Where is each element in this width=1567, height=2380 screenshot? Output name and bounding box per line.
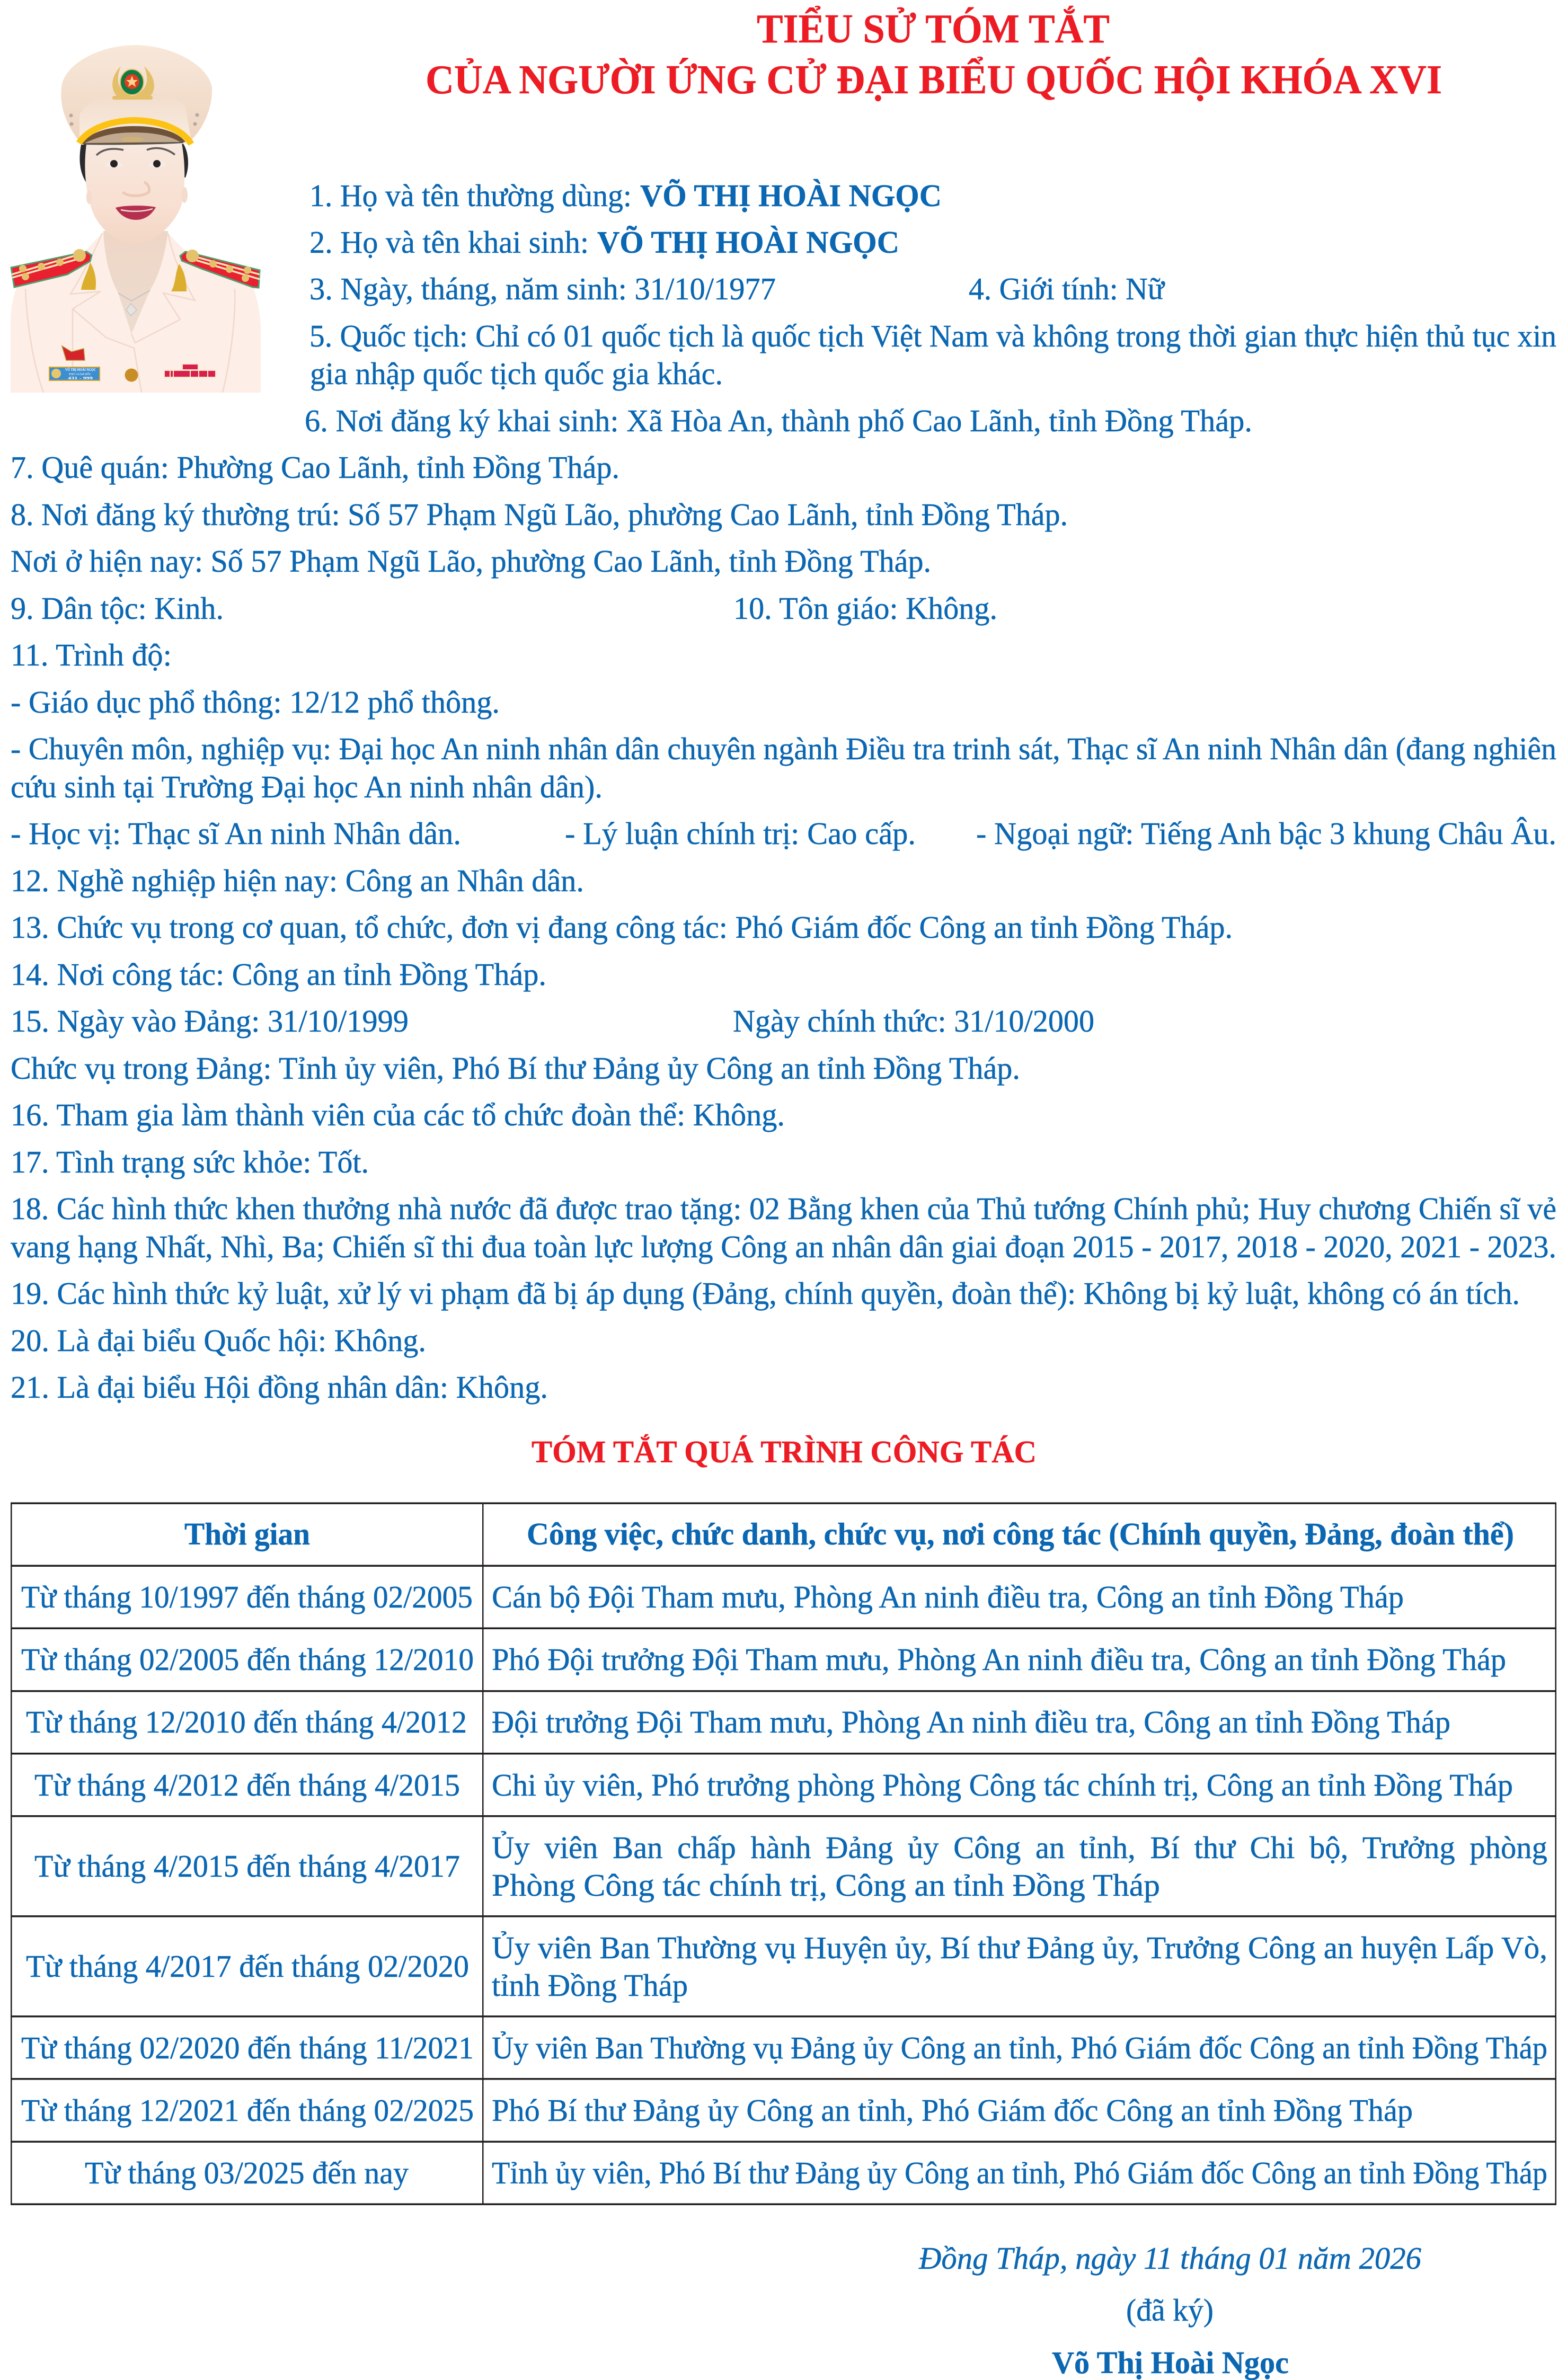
title: TIỂU SỬ TÓM TẮT (757, 6, 1110, 51)
name tag: VÕ THỊ HOÀI NGỌC (65, 368, 96, 372)
cap crown (61, 45, 212, 139)
item 19: discipline: 19. Các hình thức kỷ luật, xử lý vi phạm đã bị áp dụng (Đảng, chính quyền, đoàn thể): Không bị kỷ luật, không có án tích. (11, 1276, 1520, 1311)
signed note: (đã ký) (1126, 2293, 1214, 2328)
row 2: Từ tháng 02/2005 đến tháng 12/2010 (21, 1642, 474, 1677)
title (426, 6, 1442, 102)
item 20: national assembly deputy: 20. Là đại biểu Quốc hội: Không. (11, 1323, 426, 1358)
foreign language: - Ngoại ngữ: Tiếng Anh bậc 3 khung Châu Âu. (976, 816, 1556, 851)
row 3 (26, 1704, 1450, 1739)
item 6: birth registration: 6. Nơi đăng ký khai sinh: Xã Hòa An, thành phố Cao Lãnh, tỉnh Đồng Tháp. (305, 403, 1252, 438)
collar leaves (81, 262, 187, 291)
row 8 (21, 2093, 1413, 2128)
cap visor (81, 126, 185, 144)
row 8: Từ tháng 12/2021 đến tháng 02/2025 (21, 2093, 474, 2128)
current residence: Nơi ở hiện nay: Số 57 Phạm Ngũ Lão, phường Cao Lãnh, tỉnh Đồng Tháp. (11, 544, 931, 579)
row 5: Ủy viên Ban chấp hành Đảng ủy Công an tỉnh, Bí thư Chi bộ, Trưởng phòng (492, 1830, 1547, 1865)
table grid (11, 1503, 1556, 2205)
table header: Công việc, chức danh, chức vụ, nơi công tác (Chính quyền, Đảng, đoàn thể) (527, 1516, 1514, 1551)
official party date: Ngày chính thức: 31/10/2000 (733, 1003, 1094, 1038)
item 1: common name: 1. Họ và tên thường dùng: (309, 178, 632, 213)
row 4 (34, 1768, 1513, 1802)
neck (103, 231, 168, 334)
ribbon bars (164, 363, 216, 378)
row 4: Chi ủy viên, Phó trưởng phòng Phòng Công tác chính trị, Công an tỉnh Đồng Tháp (492, 1768, 1513, 1802)
jacket (11, 233, 261, 393)
item 10: religion: 10. Tôn giáo: Không. (733, 591, 997, 626)
academic degree: - Học vị: Thạc sĩ An ninh Nhân dân. (11, 816, 461, 851)
name tag: PHÓ GIÁM ĐỐC (69, 372, 91, 376)
row 5: Từ tháng 4/2015 đến tháng 4/2017 (34, 1849, 460, 1884)
row 7: Từ tháng 02/2020 đến tháng 11/2021 (21, 2030, 474, 2065)
item 2: birth name: 2. Họ và tên khai sinh: (309, 225, 589, 260)
item 5: nationality (309, 318, 1556, 391)
item 2: birth name: VÕ THỊ HOÀI NGỌC (597, 225, 899, 260)
row 1: Từ tháng 10/1997 đến tháng 02/2005 (21, 1579, 473, 1614)
work history table (11, 1503, 1556, 2205)
item 14: workplace: 14. Nơi công tác: Công an tỉnh Đồng Tháp. (11, 957, 546, 992)
professional qualification (11, 731, 1556, 804)
item 18: awards: vang hạng Nhất, Nhì, Ba; Chiến sĩ thi đua toàn lực lượng Công an nhân dân giai đoạn 2015 - 2017, 2018 - 2020, 2021 - 2023. (11, 1229, 1556, 1264)
jacket button (125, 369, 138, 381)
cap badge (112, 66, 154, 100)
item 17: health: 17. Tình trạng sức khỏe: Tốt. (11, 1144, 369, 1179)
row 5: Phòng Công tác chính trị, Công an tỉnh Đồng Tháp (492, 1868, 1160, 1903)
professional qualification: - Chuyên môn, nghiệp vụ: Đại học An ninh nhân dân chuyên ngành Điều tra trinh sát, Thạc sĩ An ninh Nhân dân (đang nghiên (11, 731, 1556, 766)
item 8: permanent residence: 8. Nơi đăng ký thường trú: Số 57 Phạm Ngũ Lão, phường Cao Lãnh, tỉnh Đồng Tháp. (11, 497, 1068, 532)
row 6: tỉnh Đồng Tháp (492, 1968, 688, 2003)
row 6: Ủy viên Ban Thường vụ Huyện ủy, Bí thư Đảng ủy, Trưởng Công an huyện Lấp Vò, (492, 1930, 1547, 1965)
row 9: Từ tháng 03/2025 đến nay (85, 2155, 409, 2190)
item 13: position: 13. Chức vụ trong cơ quan, tổ chức, đơn vị đang công tác: Phó Giám đốc Công an tỉnh Đồng Tháp. (11, 910, 1233, 945)
row 4: Từ tháng 4/2012 đến tháng 4/2015 (34, 1768, 460, 1802)
name tag (49, 367, 100, 380)
row 6 (26, 1930, 1547, 2003)
row 7: Ủy viên Ban Thường vụ Đảng ủy Công an tỉnh, Phó Giám đốc Công an tỉnh Đồng Tháp (492, 2030, 1547, 2065)
item 1: common name (309, 178, 942, 213)
flag pin (62, 346, 85, 360)
signature block (918, 2241, 1421, 2380)
item 15: party admission: 15. Ngày vào Đảng: 31/10/1999 (11, 1003, 409, 1038)
item 18: awards: 18. Các hình thức khen thưởng nhà nước đã được trao tặng: 02 Bằng khen của Thủ tướng Chính phủ; Huy chương Chiến sĩ vẻ (11, 1191, 1556, 1226)
item 5: nationality: gia nhập quốc tịch quốc gia khác. (310, 356, 723, 391)
table header: Thời gian (184, 1516, 310, 1551)
necklace (118, 290, 150, 316)
face (85, 143, 188, 244)
row 3: Từ tháng 12/2010 đến tháng 4/2012 (26, 1704, 467, 1739)
place and date: Đồng Tháp, ngày 11 tháng 01 năm 2026 (918, 2241, 1421, 2276)
row 2: Phó Đội trưởng Đội Tham mưu, Phòng An ninh điều tra, Công an tỉnh Đồng Tháp (492, 1642, 1506, 1677)
item 9: ethnicity: 9. Dân tộc: Kinh. (11, 591, 224, 626)
row 6: Từ tháng 4/2017 đến tháng 02/2020 (26, 1949, 469, 1984)
item 5: nationality: 5. Quốc tịch: Chỉ có 01 quốc tịch là quốc tịch Việt Nam và không trong thời gian thực hiện thủ tục xin (309, 318, 1556, 353)
item 21: people's council deputy: 21. Là đại biểu Hội đồng nhân dân: Không. (11, 1370, 548, 1405)
biography items (11, 178, 1556, 1405)
item 3: date of birth: 3. Ngày, tháng, năm sinh: 31/10/1977 (309, 271, 776, 306)
row 1: Cán bộ Đội Tham mưu, Phòng An ninh điều tra, Công an tỉnh Đồng Tháp (492, 1579, 1404, 1614)
item 2: birth name (309, 225, 899, 260)
item 7: home town: 7. Quê quán: Phường Cao Lãnh, tỉnh Đồng Tháp. (11, 450, 619, 485)
political theory: - Lý luận chính trị: Cao cấp. (565, 816, 916, 851)
portrait photo (11, 45, 261, 393)
row 5 (34, 1830, 1547, 1903)
cap rivets (69, 113, 199, 126)
item 1: common name: VÕ THỊ HOÀI NGỌC (640, 178, 942, 213)
professional qualification: cứu sinh tại Trường Đại học An ninh nhân dân). (11, 769, 603, 804)
row 8: Phó Bí thư Đảng ủy Công an tỉnh, Phó Giám đốc Công an tỉnh Đồng Tháp (492, 2093, 1413, 2128)
work history heading: TÓM TẮT QUÁ TRÌNH CÔNG TÁC (532, 1434, 1037, 1469)
row 2 (21, 1642, 1506, 1677)
row 1 (21, 1579, 1404, 1614)
name tag: 431 - 999 (68, 376, 93, 380)
row 7 (21, 2030, 1547, 2065)
item 4: gender: 4. Giới tính: Nữ (969, 271, 1165, 306)
cap band (79, 92, 192, 144)
cap gold braid (79, 120, 191, 144)
left shoulder board (11, 249, 92, 287)
hair (79, 141, 188, 183)
item 16: organizations: 16. Tham gia làm thành viên của các tổ chức đoàn thể: Không. (11, 1097, 785, 1132)
party position: Chức vụ trong Đảng: Tỉnh ủy viên, Phó Bí thư Đảng ủy Công an tỉnh Đồng Tháp. (11, 1051, 1020, 1086)
title: CỦA NGƯỜI ỨNG CỬ ĐẠI BIỂU QUỐC HỘI KHÓA XVI (426, 57, 1442, 102)
item 12: occupation: 12. Nghề nghiệp hiện nay: Công an Nhân dân. (11, 863, 584, 898)
item 18: awards (11, 1191, 1556, 1264)
general education: - Giáo dục phổ thông: 12/12 phổ thông. (11, 685, 500, 720)
item 11: qualifications: 11. Trình độ: (11, 637, 172, 672)
right shoulder board (180, 250, 260, 288)
row 3: Đội trưởng Đội Tham mưu, Phòng An ninh điều tra, Công an tỉnh Đồng Tháp (492, 1704, 1450, 1739)
signer name: Võ Thị Hoài Ngọc (1052, 2345, 1289, 2380)
row 9: Tỉnh ủy viên, Phó Bí thư Đảng ủy Công an tỉnh, Phó Giám đốc Công an tỉnh Đồng Tháp (492, 2155, 1547, 2190)
jacket lapels (25, 233, 235, 393)
